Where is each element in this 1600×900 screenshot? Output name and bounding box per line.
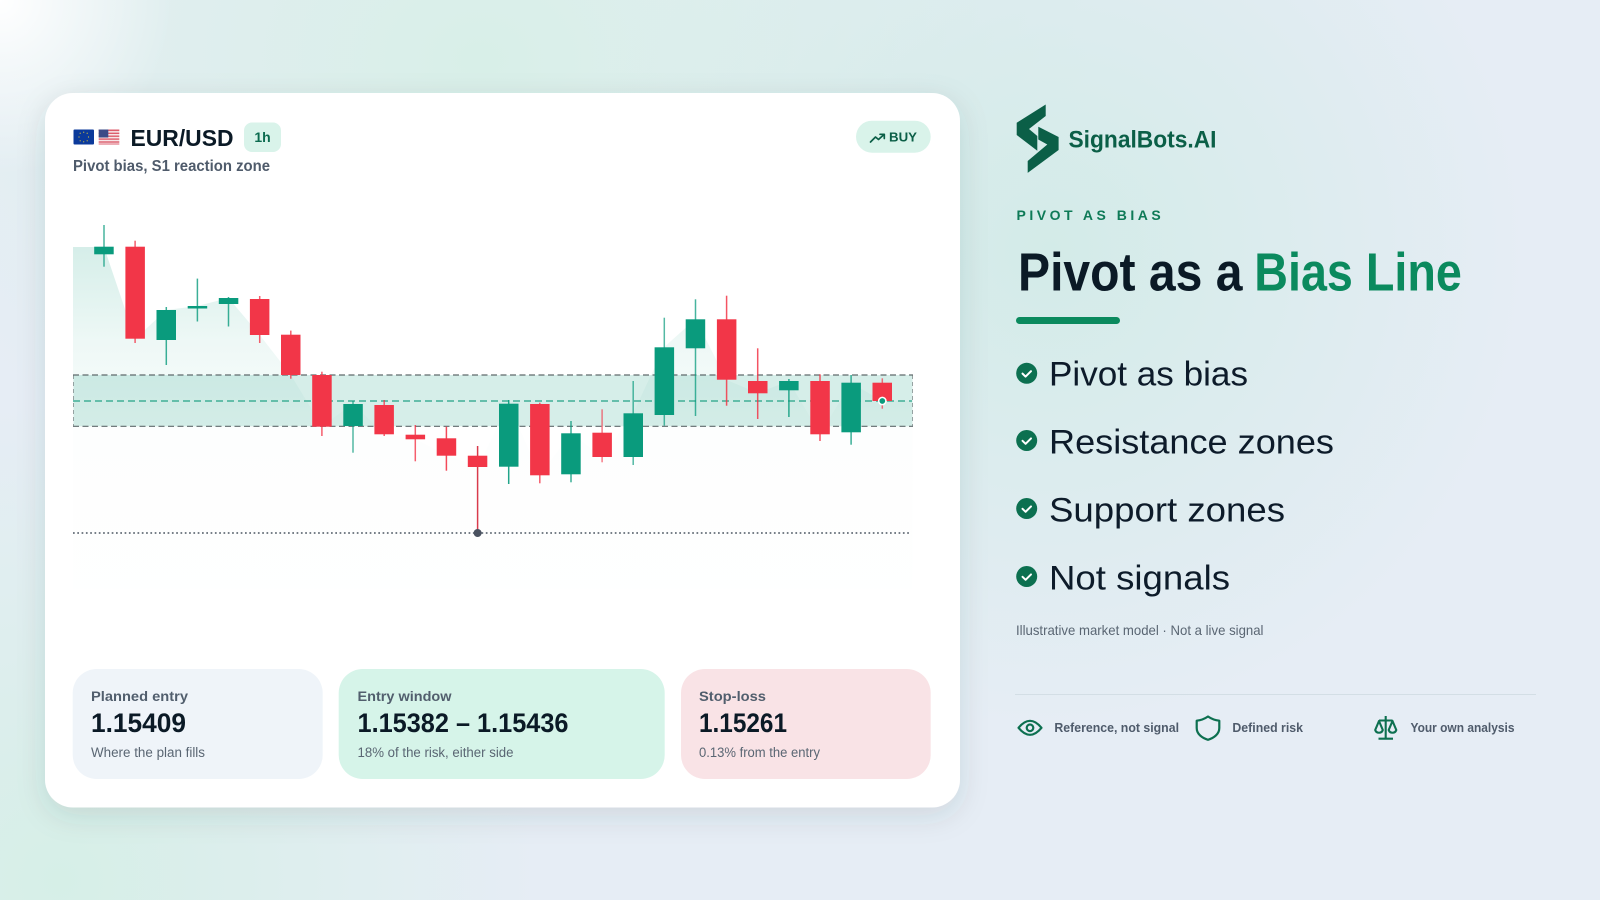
stat: stop-loss <box>681 669 931 779</box>
wordmark: SignalBots.AI <box>1068 126 1216 153</box>
stop-loss marker <box>474 529 482 537</box>
note: reference: Reference, not signal <box>1054 720 1179 735</box>
candle 5 <box>219 297 238 326</box>
stat: planned entry: Planned entry <box>91 689 189 704</box>
candle 19 <box>655 318 674 426</box>
candle 11 <box>406 425 425 461</box>
candle 25 <box>841 375 861 445</box>
price area <box>73 247 912 640</box>
stat: entry window: 18% of the risk, either side <box>358 745 514 760</box>
stat: entry window: Entry window <box>358 689 452 704</box>
disclaimer: Illustrative market model · Not a live signal <box>1016 622 1264 638</box>
timeframe badge <box>244 122 281 152</box>
candle 26 <box>872 378 892 409</box>
BUY badge: BUY <box>889 130 917 145</box>
candle 6 <box>250 296 269 343</box>
stat: planned entry: Where the plan fills <box>91 745 205 760</box>
stat: planned entry <box>73 669 323 779</box>
candle 18 <box>624 381 643 465</box>
S1 reaction zone <box>73 375 913 426</box>
candle 24 <box>810 374 830 441</box>
candle 15 <box>530 403 550 483</box>
candlestick chart <box>73 225 913 640</box>
note: own analysis <box>1375 716 1514 739</box>
icon: EU flag <box>74 130 94 144</box>
note: own analysis: Your own analysis <box>1410 720 1514 735</box>
candle 14 <box>499 400 518 484</box>
subtitle: Pivot bias, S1 reaction zone <box>73 158 270 175</box>
title <box>1018 243 1462 303</box>
stat: stop-loss: 0.13% from the entry <box>699 745 820 760</box>
item: support zones: Support zones <box>1049 492 1285 530</box>
title: Bias Line <box>1254 243 1462 303</box>
candle 10 <box>374 400 394 436</box>
stat: stop-loss: 1.15261 <box>699 708 787 738</box>
stat: entry window: 1.15382 – 1.15436 <box>358 708 568 738</box>
panel: EUR/USD chart card <box>45 93 960 808</box>
candle 3 <box>156 307 176 365</box>
candle 1 <box>94 225 114 267</box>
candle 7 <box>281 331 300 379</box>
candle 9 <box>343 401 363 453</box>
footer notes <box>1018 716 1514 740</box>
pair name: EUR/USD <box>130 125 234 151</box>
candle 4 <box>188 279 207 322</box>
checklist <box>1016 356 1334 598</box>
candle 16 <box>561 421 581 482</box>
timeframe badge: 1h <box>254 129 271 145</box>
icon: SignalBots mark <box>1017 104 1059 173</box>
item: pivot as bias: Pivot as bias <box>1049 356 1248 394</box>
BUY badge <box>856 121 931 153</box>
item: resistance zones: Resistance zones <box>1049 424 1334 462</box>
stop-loss dotted line <box>73 532 911 534</box>
stat: entry window <box>339 669 665 779</box>
note: defined risk: Defined risk <box>1232 720 1304 735</box>
logo <box>1017 104 1216 173</box>
candle 2 <box>125 241 145 343</box>
candle 21 <box>717 296 736 406</box>
candle 8 <box>312 372 332 436</box>
title: Pivot as a <box>1018 243 1243 303</box>
entry marker <box>879 397 886 405</box>
stat: stop-loss: Stop-loss <box>699 689 766 704</box>
candle 17 <box>592 409 612 462</box>
pivot line <box>73 400 912 402</box>
candle 22 <box>748 348 768 419</box>
candle 20 <box>686 299 705 416</box>
card header <box>73 121 931 175</box>
eyebrow: PIVOT AS BIAS <box>1016 207 1164 223</box>
stat: planned entry: 1.15409 <box>91 708 186 738</box>
candle 23 <box>779 379 799 417</box>
candle 13 <box>468 446 487 533</box>
item: not signals: Not signals <box>1049 560 1230 598</box>
note: defined risk <box>1197 716 1304 740</box>
candle 12 <box>437 427 456 471</box>
title underline <box>1016 317 1120 324</box>
icon: US flag <box>99 130 119 144</box>
